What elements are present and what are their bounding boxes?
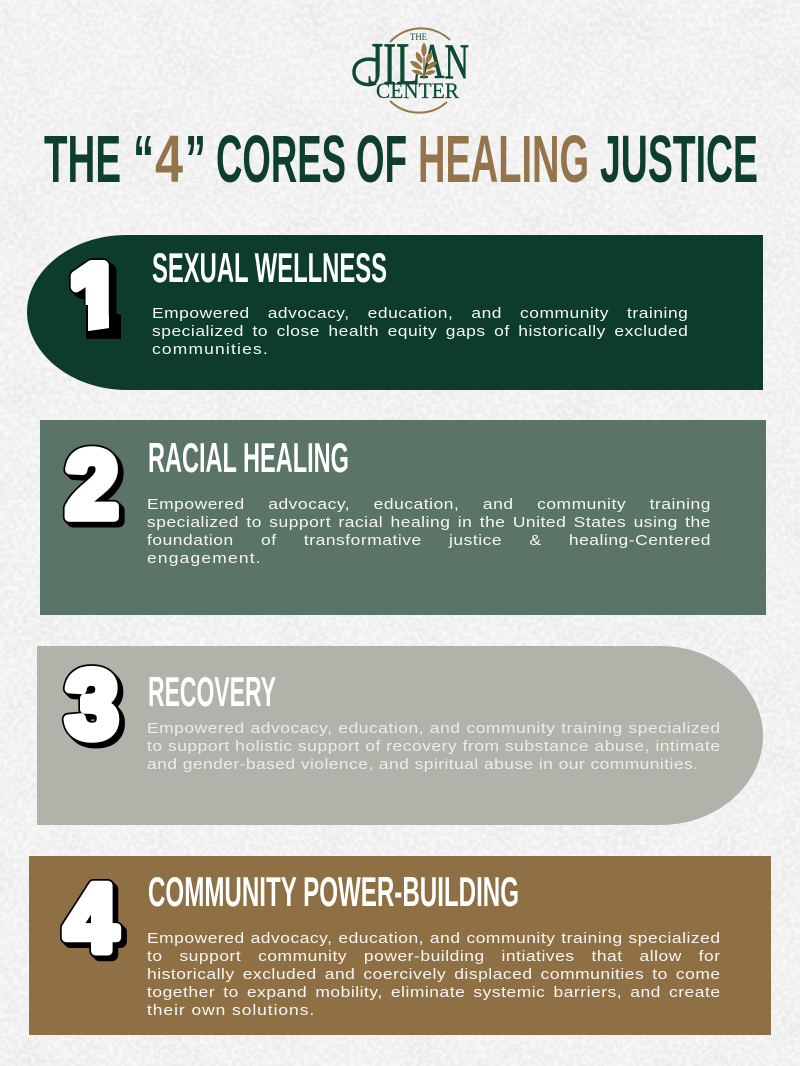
panel 4 body text	[147, 931, 721, 1019]
title: ”	[185, 122, 206, 197]
panel 3 body text	[147, 721, 721, 773]
panel 3 body text: Empowered advocacy, education, and community training specialized	[147, 721, 721, 737]
number 3: 3	[66, 652, 118, 758]
logo: The Jilan Center	[354, 28, 469, 113]
title: THE	[44, 122, 121, 197]
panel 2 body text	[147, 497, 711, 567]
panel 1 background	[27, 235, 763, 390]
panel 4 body text: together to expand mobility, eliminate systemic barriers, and create	[147, 985, 721, 1001]
number 2: 2	[66, 432, 118, 538]
title: 4	[155, 122, 183, 197]
title	[44, 122, 758, 197]
logo leaf emblem	[410, 42, 437, 79]
number 1: 1	[70, 246, 120, 352]
logo wordmark	[354, 31, 469, 103]
panel 4 body text: historically excluded and coercively displaced communities to come	[147, 967, 721, 983]
heading 2: RACIAL HEALING	[148, 434, 349, 481]
panel 2 body text: engagement.	[147, 551, 262, 567]
number 1: 1	[70, 246, 120, 352]
number 4: 4	[65, 866, 117, 972]
panel 3 background	[37, 646, 763, 825]
number 3: 3	[68, 654, 120, 760]
panel 2 body text: foundation of transformative justice & healing-Centered	[147, 533, 711, 549]
number 3: 3	[66, 652, 118, 758]
number 2: 2	[66, 432, 118, 538]
panel 1 body text: Empowered advocacy, education, and community training	[152, 306, 688, 322]
logo ring	[390, 28, 450, 113]
panel 2 body text: specialized to support racial healing in the United States using the	[147, 515, 711, 531]
title: HEALING	[418, 122, 589, 197]
number 4: 4	[69, 870, 121, 976]
number 1: 1	[73, 249, 123, 355]
heading 4: COMMUNITY POWER-BUILDING	[148, 868, 519, 915]
panel 4 body text: to support community power-building intiatives that allow for	[147, 949, 721, 965]
panel 1 body text: specialized to close health equity gaps of historically excluded	[152, 324, 688, 340]
logo wordmark: AN	[420, 33, 469, 89]
panel 1 body text: communities.	[152, 342, 269, 358]
number 1: 1	[76, 251, 126, 357]
panel 1 body text	[152, 306, 688, 358]
heading 3: RECOVERY	[148, 668, 276, 715]
number 4: 4	[65, 866, 117, 972]
panel 3 body text: and gender-based violence, and spiritual abuse in our communities.	[147, 757, 698, 773]
title: CORES	[216, 122, 346, 197]
title: “	[133, 122, 154, 197]
number 2: 2	[68, 434, 120, 540]
logo wordmark: THE	[410, 32, 427, 42]
panel 2 background	[40, 420, 766, 615]
panel 4 body text: their own solutions.	[147, 1003, 315, 1019]
number 3: 3	[70, 656, 122, 762]
number 4: 4	[67, 868, 119, 974]
number 2: 2	[70, 436, 122, 542]
panel 2 body text: Empowered advocacy, education, and community training	[147, 497, 711, 513]
panel 4 background	[29, 856, 771, 1035]
heading 1: SEXUAL WELLNESS	[152, 244, 387, 291]
panel 4 body text: Empowered advocacy, education, and community training specialized	[147, 931, 721, 947]
panel 3 body text: to support holistic support of recovery from substance abuse, intimate	[147, 739, 721, 755]
logo wordmark: JIL	[368, 31, 420, 97]
logo wordmark: CENTER	[376, 78, 459, 103]
title: OF	[356, 122, 407, 197]
